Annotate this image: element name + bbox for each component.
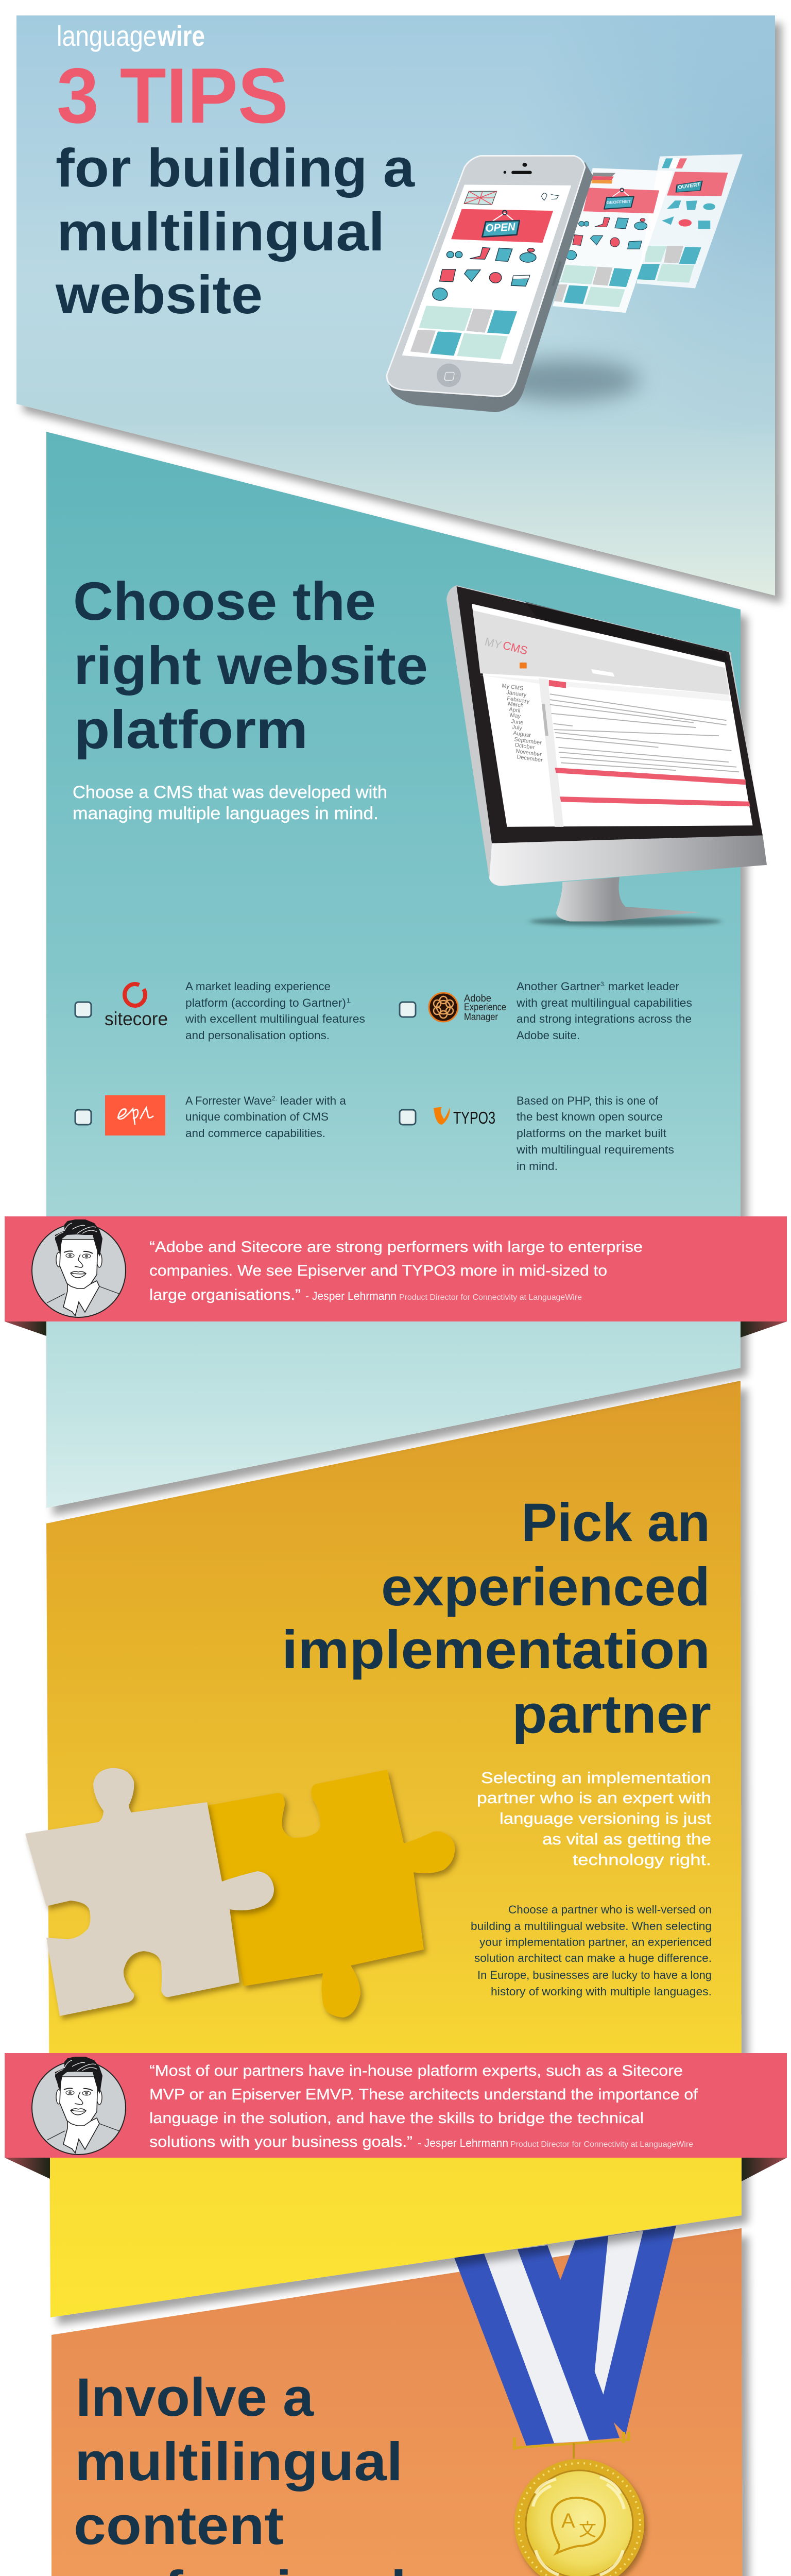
option: typo3: [400, 1094, 674, 1173]
option: adobe experience manager: with great multilingual capabilities: [516, 996, 692, 1009]
text block: choose a partner: In Europe, businesses are lucky to have a long: [477, 1969, 712, 1981]
text block: selecting an implementation partner: Selecting an implementation: [481, 1769, 711, 1787]
heading: choose the right website platform: [73, 571, 428, 760]
option: typo3: platforms on the market built: [517, 1127, 666, 1140]
option: sitecore: [75, 980, 365, 1042]
title: for building a multilingual website: for building a: [56, 138, 416, 198]
quote text 2: solutions with your business goals.”: [149, 2133, 412, 2150]
text block: choose a partner: Choose a partner who is well-versed on: [508, 1903, 712, 1916]
quote text 1: “Adobe and Sitecore are strong performers with large to enterprise: [149, 1239, 643, 1256]
heading: choose the right website platform: platform: [74, 700, 308, 760]
quote text 1: large organisations.”: [149, 1286, 301, 1303]
illustration: desktop monitor with cms: June: [511, 718, 524, 726]
option: sitecore: 1.: [347, 997, 352, 1004]
quote text 1: - Jesper Lehrmann: [305, 1290, 397, 1302]
text block: selecting an implementation partner: language versioning is just: [500, 1809, 711, 1827]
option: adobe experience manager: Manager: [464, 1012, 498, 1023]
heading: involve a multilingual content professional: Involve a: [76, 2367, 315, 2428]
title: for building a multilingual website: [55, 138, 416, 325]
heading: pick an experienced implementation partner: [282, 1493, 711, 1744]
option: sitecore: A market leading experience: [185, 980, 331, 993]
illustration: desktop monitor with cms: September: [514, 736, 542, 747]
option: episerver: A Forrester Wave: [185, 1094, 272, 1107]
quote text 1: companies. We see Episerver and TYPO3 more in mid-sized to: [149, 1262, 607, 1279]
heading: involve a multilingual content professional: content: [74, 2496, 284, 2556]
illustration: desktop monitor with cms: November: [515, 748, 542, 758]
heading: pick an experienced implementation partner: Pick an: [521, 1493, 710, 1553]
text block: selecting an implementation partner: [477, 1769, 711, 1869]
panel: tip 2 implementation partner: [25, 1381, 742, 2317]
text block: choose a partner: history of working with multiple languages.: [491, 1985, 712, 1998]
option: typo3: TYPO3: [453, 1108, 495, 1127]
logo: languagewire white: wire: [157, 20, 205, 52]
illustration: medal with ribbon: [454, 2226, 676, 2576]
portrait: jesper lehrmann: [32, 2057, 126, 2155]
text block: selecting an implementation partner: partner who is an expert with: [477, 1789, 711, 1807]
option: episerver: 2.: [272, 1095, 277, 1102]
option: adobe experience manager: market leader: [608, 980, 679, 993]
heading: involve a multilingual content professional: multilingual: [75, 2432, 403, 2492]
option: adobe experience manager: Adobe suite.: [517, 1029, 580, 1042]
option: adobe experience manager: and strong integrations across the: [517, 1012, 692, 1025]
illustration: smartphone with localized pages: OPEN: [485, 221, 516, 234]
option: typo3: in mind.: [517, 1160, 558, 1173]
quote text 1: [149, 1239, 643, 1303]
heading: pick an experienced implementation partner: partner: [512, 1684, 711, 1744]
quote ribbon 2: [5, 2053, 787, 2181]
quote text 2: - Jesper Lehrmann: [418, 2137, 508, 2149]
option: typo3: the best known open source: [517, 1110, 663, 1123]
heading: pick an experienced implementation partner: implementation: [282, 1620, 710, 1680]
option: sitecore: with excellent multilingual features: [185, 1012, 365, 1025]
illustration: medal with ribbon: 文: [579, 2520, 596, 2540]
option: typo3: with multilingual requirements: [516, 1143, 674, 1156]
option: adobe experience manager: Another Gartner: [517, 980, 600, 993]
quote text 2: Product Director for Connectivity at LanguageWire: [510, 2140, 693, 2149]
option: episerver: unique combination of CMS: [185, 1110, 329, 1123]
illustration: desktop monitor with cms: January: [506, 689, 527, 698]
illustration: desktop monitor with cms: December: [517, 754, 543, 764]
text block: choose a cms: Choose a CMS that was developed with: [73, 783, 387, 802]
option: sitecore: platform (according to Gartner): [185, 996, 346, 1009]
option: adobe experience manager: [400, 980, 692, 1042]
quote text 2: [149, 2062, 698, 2150]
text block: choose a cms: managing multiple languages in mind.: [73, 804, 379, 823]
illustration: puzzle pieces: [25, 1768, 455, 2018]
title: 3 tips: 3 TIPS: [57, 52, 288, 140]
illustration: smartphone with localized pages: GEÖFFNET: [607, 199, 631, 205]
title: for building a multilingual website: website: [55, 265, 263, 325]
illustration: desktop monitor with cms: July: [512, 724, 523, 732]
illustration: smartphone with localized pages: OUVERT: [678, 182, 701, 191]
panel: hero header: [16, 15, 775, 596]
quote text 1: Product Director for Connectivity at LanguageWire: [399, 1293, 582, 1302]
panel: tip 1 website platform: [46, 432, 767, 1508]
illustration: medal with ribbon: A: [561, 2510, 575, 2532]
option: typo3: Based on PHP, this is one of: [517, 1094, 659, 1107]
illustration: desktop monitor with cms: MY: [484, 635, 503, 652]
option: adobe experience manager: 3.: [600, 980, 606, 988]
illustration: desktop monitor with cms: [446, 585, 767, 926]
option: adobe experience manager: Adobe: [464, 993, 491, 1004]
logo: languagewire white: language: [57, 20, 157, 52]
illustration: desktop monitor with cms: May: [510, 712, 521, 720]
text block: selecting an implementation partner: technology right.: [573, 1851, 711, 1869]
heading: pick an experienced implementation partner: experienced: [381, 1557, 710, 1617]
option: sitecore: sitecore: [105, 1008, 168, 1029]
quote text 2: MVP or an Episerver EMVP. These architects understand the importance of: [149, 2086, 698, 2103]
option: sitecore: and personalisation options.: [185, 1029, 330, 1042]
option: episerver: leader with a: [280, 1094, 347, 1107]
illustration: desktop monitor with cms: March: [508, 701, 524, 709]
panel: tip 3 content professional: [51, 2228, 744, 2576]
heading: involve a multilingual content professional: [74, 2367, 406, 2576]
portrait: jesper lehrmann: [32, 1219, 126, 1317]
illustration: desktop monitor with cms: April: [509, 706, 521, 714]
illustration: desktop monitor with cms: My CMS: [502, 683, 524, 692]
heading: choose the right website platform: right website: [74, 636, 428, 696]
title: for building a multilingual website: multilingual: [57, 202, 385, 262]
text block: choose a cms: [73, 783, 387, 823]
option: episerver: [75, 1094, 347, 1140]
quote text 2: “Most of our partners have in-house platform experts, such as a Sitecore: [149, 2062, 683, 2079]
text block: selecting an implementation partner: as vital as getting the: [542, 1830, 711, 1848]
option: episerver: and commerce capabilities.: [185, 1127, 325, 1140]
heading: choose the right website platform: Choose the: [73, 571, 376, 632]
quote text 2: language in the solution, and have the skills to bridge the technical: [149, 2110, 644, 2127]
quote ribbon 1: [5, 1216, 787, 1337]
illustration: desktop monitor with cms: October: [514, 742, 535, 751]
illustration: desktop monitor with cms: February: [507, 696, 530, 705]
option: adobe experience manager: Experience: [464, 1002, 506, 1013]
illustration: desktop monitor with cms: CMS: [502, 639, 529, 657]
text block: choose a partner: [471, 1903, 712, 1998]
text block: choose a partner: building a multilingual website. When selecting: [471, 1920, 712, 1933]
text block: choose a partner: your implementation partner, an experienced: [479, 1936, 712, 1948]
illustration: smartphone with localized pages: [386, 154, 743, 412]
illustration: desktop monitor with cms: August: [513, 730, 531, 739]
text block: choose a partner: solution architect can make a huge difference.: [474, 1952, 712, 1964]
